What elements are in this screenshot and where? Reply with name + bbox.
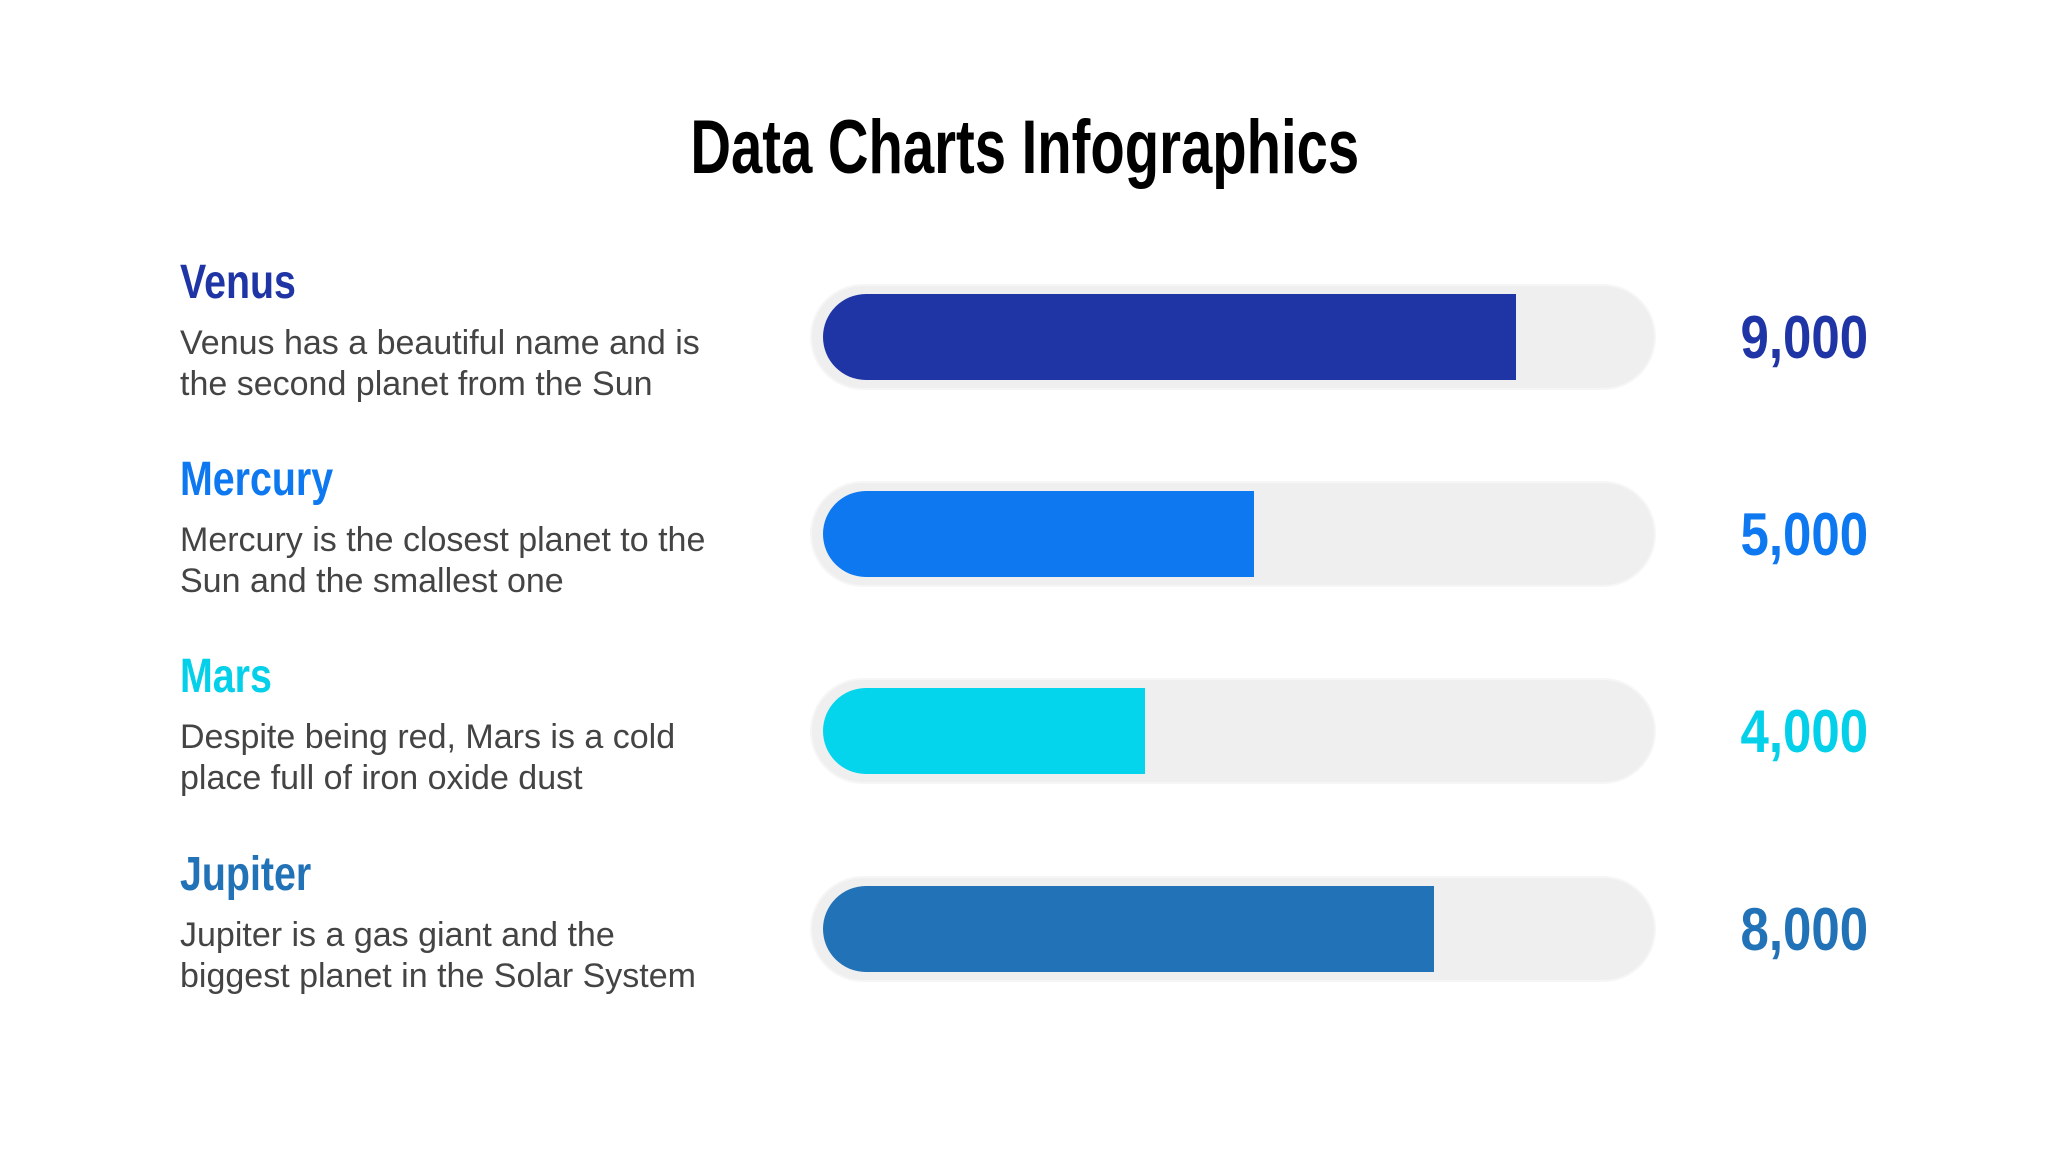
bar: jupiter: [812, 878, 1654, 980]
bar: venus: [812, 286, 1654, 388]
row: mars: [180, 650, 1868, 797]
value: mercury: 5,000: [1740, 501, 1868, 568]
row: mercury: [180, 453, 1868, 600]
description: mars: Despite being red, Mars is a cold place full of iron oxide dust: [180, 718, 675, 797]
description: jupiter: Jupiter is a gas giant and the biggest planet in the Solar System: [180, 916, 696, 995]
row: venus: [180, 256, 1868, 403]
description: venus: Venus has a beautiful name and is the second planet from the Sun: [180, 324, 700, 403]
value: mars: 4,000: [1740, 698, 1868, 765]
description: mercury: Mercury is the closest planet to the Sun and the smallest one: [180, 521, 705, 600]
heading: venus: Venus: [180, 256, 296, 309]
value: venus: 9,000: [1740, 304, 1868, 371]
row: jupiter: [180, 848, 1868, 995]
heading: mercury: Mercury: [180, 453, 333, 506]
bar: mars: [812, 680, 1654, 782]
title: Data Charts Infographics: [690, 105, 1359, 190]
value: jupiter: 8,000: [1740, 896, 1868, 963]
heading: jupiter: Jupiter: [180, 848, 311, 901]
bar: mercury: [812, 483, 1654, 585]
heading: mars: Mars: [180, 650, 272, 703]
